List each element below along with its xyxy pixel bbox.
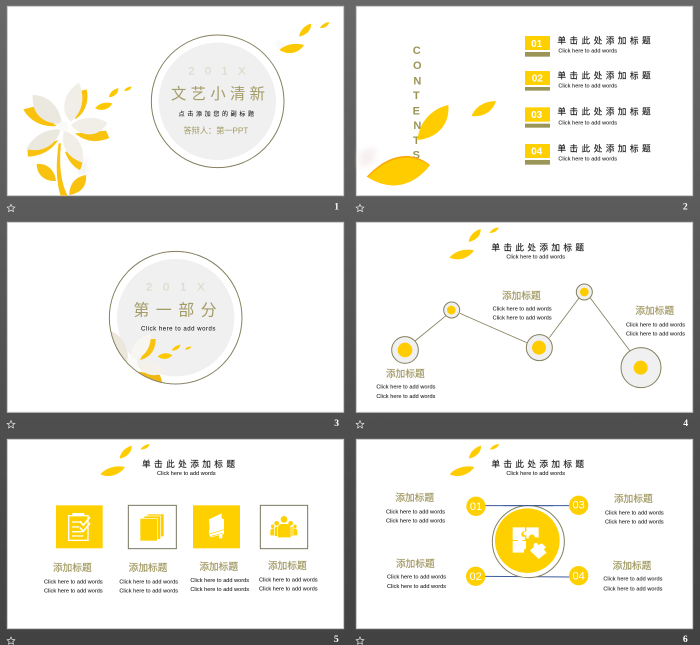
card 1 text: Click here to add words: [44, 589, 103, 595]
slide title: 单击此处添加标题: [491, 241, 584, 252]
year text: 2 0 1 X: [146, 282, 205, 294]
contents item 04: [525, 142, 651, 165]
card 3: book: [193, 505, 240, 548]
contents item 03: Click here to add words: [558, 120, 617, 126]
contents vertical heading: N: [413, 75, 421, 87]
label: point 1: 添加标题: [386, 368, 425, 380]
section subtitle: Click here to add words: [141, 327, 215, 333]
item 01 text: [386, 492, 445, 525]
footer icon: [7, 421, 15, 428]
icon: paper flower: [23, 83, 132, 196]
footer icon: [7, 637, 15, 644]
label: point 3: 添加标题: [635, 305, 674, 317]
contents vertical heading: O: [413, 60, 422, 72]
contents vertical heading: T: [413, 135, 420, 147]
footer icon: [356, 637, 364, 644]
item 02 text: 添加标题: [396, 558, 435, 570]
card 4 text: 添加标题: [268, 560, 307, 572]
contents vertical heading: E: [413, 105, 420, 117]
icon: people: [270, 516, 297, 537]
contents item 02: 02: [532, 74, 543, 84]
puzzle diagram: 01: [470, 501, 482, 513]
section circle: [108, 251, 242, 384]
contents item 01: [525, 35, 651, 57]
icon: puzzle: [513, 527, 547, 559]
contents vertical heading: C: [413, 45, 421, 57]
puzzle diagram: 02: [470, 571, 482, 583]
icon: clipboard: [69, 514, 90, 540]
contents item 03: 03: [531, 110, 543, 121]
item 04 text: Click here to add words: [603, 586, 663, 592]
section title: 第一部分: [133, 302, 217, 320]
slide title: 单击此处添加标题: [491, 458, 584, 469]
item 04 text: [603, 560, 663, 592]
presenter: 答辩人：第一PPT: [183, 126, 248, 136]
icon: leaves: [359, 101, 496, 185]
item 01 text: 添加标题: [395, 492, 434, 504]
contents item 04: 04: [531, 146, 543, 158]
card 1 text: [44, 562, 103, 595]
icon: falling leaves: [276, 22, 329, 53]
card 4 text: Click here to add words: [259, 577, 318, 583]
card 1: checklist: [56, 505, 103, 548]
label: point 1: Click here to add words: [376, 394, 436, 400]
contents item 04: Click here to add words: [558, 157, 617, 163]
contents vertical heading: N: [413, 120, 421, 132]
title circle: [151, 35, 284, 168]
line chart: [392, 284, 661, 388]
slide subtitle: Click here to add words: [157, 471, 216, 477]
label: point 2: 添加标题: [502, 290, 541, 302]
item 02 text: Click here to add words: [387, 584, 446, 590]
item 03 text: Click here to add words: [605, 519, 664, 525]
slide title: 单击此处添加标题: [142, 458, 235, 469]
card 2: documents: [128, 505, 176, 549]
slide number: 1: [334, 202, 339, 212]
puzzle diagram: [466, 496, 588, 586]
contents item 03: [525, 105, 651, 128]
panel: slide 4 line chart: [356, 222, 693, 429]
card 2 text: Click here to add words: [119, 580, 178, 586]
icon: book: [209, 513, 224, 538]
contents item 02: [525, 69, 651, 91]
label: point 2: Click here to add words: [493, 316, 552, 322]
footer icon: [356, 421, 364, 428]
contents vertical heading: T: [413, 90, 420, 102]
label: point 3: [626, 305, 685, 337]
flower clipped in circle: [112, 332, 162, 382]
contents item 02: Click here to add words: [558, 83, 617, 89]
card 3 text: [190, 561, 249, 593]
year text: 2 0 1 X: [188, 65, 246, 77]
label: point 1: [376, 368, 436, 400]
small leaves: [158, 345, 191, 359]
card 1 text: 添加标题: [53, 562, 92, 574]
icon: leaves: [449, 227, 499, 259]
item 03 text: Click here to add words: [605, 510, 664, 516]
contents item 01: Click here to add words: [558, 49, 617, 55]
panel: slide 3 section: [7, 222, 344, 429]
card 4: team: [260, 505, 308, 549]
item 01 text: Click here to add words: [386, 519, 445, 525]
contents item 02: 单击此处添加标题: [557, 69, 651, 80]
card 3 text: Click here to add words: [190, 578, 249, 584]
main title: 文艺小清新: [171, 86, 265, 103]
item 02 text: [387, 558, 446, 590]
panel: slide 6 puzzle diagram: [356, 439, 693, 645]
panel: slide 1 cover: [7, 6, 344, 213]
subtitle: 点击添加您的副标题: [179, 110, 254, 118]
contents item 01: 单击此处添加标题: [557, 35, 651, 46]
slide number: 3: [334, 418, 339, 429]
label: point 3: Click here to add words: [626, 331, 685, 337]
card 1 text: Click here to add words: [44, 580, 103, 586]
slide number: 6: [683, 634, 688, 645]
contents item 01: 01: [531, 39, 543, 50]
item 01 text: Click here to add words: [386, 510, 445, 516]
puzzle diagram: 04: [573, 570, 585, 582]
item 04 text: Click here to add words: [603, 577, 663, 583]
label: point 1: Click here to add words: [376, 384, 436, 390]
slide number: 5: [334, 634, 339, 645]
footer icon: [7, 204, 15, 212]
slide subtitle: Click here to add words: [506, 255, 565, 261]
card 2 text: [119, 562, 178, 595]
label: point 3: Click here to add words: [626, 322, 685, 328]
contents item 03: 单击此处添加标题: [557, 105, 651, 116]
icon: stacked pages: [140, 514, 164, 541]
card 4 text: [259, 560, 318, 592]
slide subtitle: Click here to add words: [506, 471, 565, 477]
contents item 04: 单击此处添加标题: [557, 142, 651, 153]
icon: leaves: [450, 444, 499, 476]
contents vertical heading: S: [413, 150, 420, 162]
label: point 2: Click here to add words: [493, 307, 552, 313]
card 4 text: Click here to add words: [259, 586, 318, 592]
slide number: 2: [683, 202, 688, 212]
puzzle diagram: 03: [573, 499, 585, 511]
card 3 text: Click here to add words: [190, 587, 249, 593]
panel: slide 2 contents: [356, 6, 693, 213]
label: point 2: [493, 290, 552, 322]
card 2 text: Click here to add words: [119, 589, 178, 595]
footer icon: [356, 204, 364, 212]
card 3 text: 添加标题: [199, 561, 238, 573]
contents vertical heading: [413, 45, 422, 162]
slide number: 4: [683, 418, 688, 429]
item 03 text: 添加标题: [614, 493, 653, 505]
item 03 text: [605, 493, 664, 525]
item 04 text: 添加标题: [613, 560, 652, 572]
item 02 text: Click here to add words: [387, 574, 446, 580]
panel: slide 5 icon cards: [7, 439, 344, 645]
icon: leaves: [100, 444, 150, 476]
card 2 text: 添加标题: [129, 562, 168, 574]
